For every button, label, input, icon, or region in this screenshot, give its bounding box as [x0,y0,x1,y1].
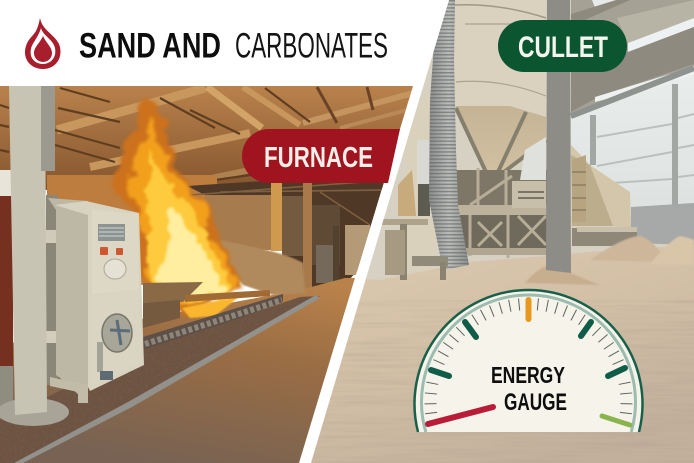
back wall [47,175,273,285]
silo [454,0,546,175]
concrete column [546,0,571,273]
left window [0,170,12,196]
badge: furnace: FURNACE [264,142,373,174]
panel: cullet photo scene [300,0,694,463]
brick panel [0,196,13,366]
badge: furnace [242,129,400,183]
gauge label: ENERGY [491,362,565,388]
windows [570,66,694,216]
wall pillars [271,183,370,295]
lower wall [631,203,694,245]
badge: cullet [498,20,627,72]
gravel strip [0,296,320,463]
ceiling beams [0,87,413,183]
sand mound [221,240,305,296]
floor [0,278,355,463]
dark far hall [188,181,384,287]
badge: cullet: CULLET [518,31,608,64]
corrugated hose [429,0,469,270]
roof structure [571,0,694,120]
minor ticks [425,298,632,414]
conical structure [571,145,637,246]
needle: green [602,416,630,425]
gauge label [491,362,567,416]
steel platform [456,137,548,258]
sand floor [300,245,694,463]
panel: furnace photo scene [0,86,420,463]
sand ripple texture [326,300,694,438]
equipment base [382,219,448,280]
side frame [46,195,58,385]
icon: flame with drop [25,18,61,69]
left building [398,95,430,216]
back wall [366,0,669,280]
title [79,26,388,66]
control cabinet [48,198,144,403]
gauge dome [414,290,642,432]
sand piles [525,236,694,285]
energy gauge [414,290,642,432]
gravel texture [0,290,325,463]
needle: red [428,407,493,424]
furnace conveyor [143,282,283,350]
lower left rail [0,366,13,410]
header panel [0,0,449,86]
major ticks [431,300,625,376]
curb [14,295,320,463]
gauge label: GAUGE [504,389,567,416]
ceiling [0,86,420,190]
support column [0,86,69,426]
flames [116,100,242,318]
title: CARBONATES [235,26,388,66]
title: SAND AND [79,26,221,66]
